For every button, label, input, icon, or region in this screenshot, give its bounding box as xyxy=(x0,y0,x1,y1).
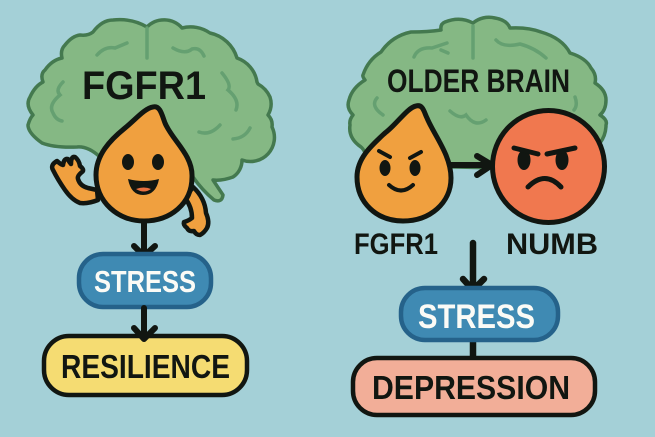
box: stress xyxy=(79,254,211,307)
icon: resting arm xyxy=(184,187,208,235)
box: resilience xyxy=(44,336,247,395)
icon: left brain xyxy=(28,20,274,201)
box: stress: STRESS xyxy=(94,264,196,299)
icon: right brain xyxy=(348,17,606,170)
panel: older brain xyxy=(348,17,606,415)
panel: young brain with FGFR1 xyxy=(28,20,274,395)
box: depression xyxy=(353,358,595,415)
heading: older brain: OLDER BRAIN xyxy=(387,63,570,99)
arrow: FGFR1 to NUMB xyxy=(446,156,492,175)
box: depression: DEPRESSION xyxy=(372,369,570,406)
label: FGFR1: FGFR1 xyxy=(354,228,438,261)
arrow: FGFR1 to stress xyxy=(134,222,155,256)
icon: happy FGFR1 drop xyxy=(96,107,192,221)
arrow: NUMB to stress xyxy=(463,243,484,290)
box: stress xyxy=(401,288,558,340)
label: NUMB: NUMB xyxy=(506,228,598,261)
icon: waving arm xyxy=(52,157,98,203)
box: resilience: RESILIENCE xyxy=(61,348,230,385)
icon: FGFR1 drop with wary face xyxy=(357,106,451,221)
connector: stress to depression xyxy=(470,338,476,358)
arrow: stress to resilience xyxy=(134,308,155,339)
icon: angry NUMB face xyxy=(492,110,604,222)
heading: FGFR1: FGFR1 xyxy=(82,64,206,108)
box: stress: STRESS xyxy=(418,298,535,336)
